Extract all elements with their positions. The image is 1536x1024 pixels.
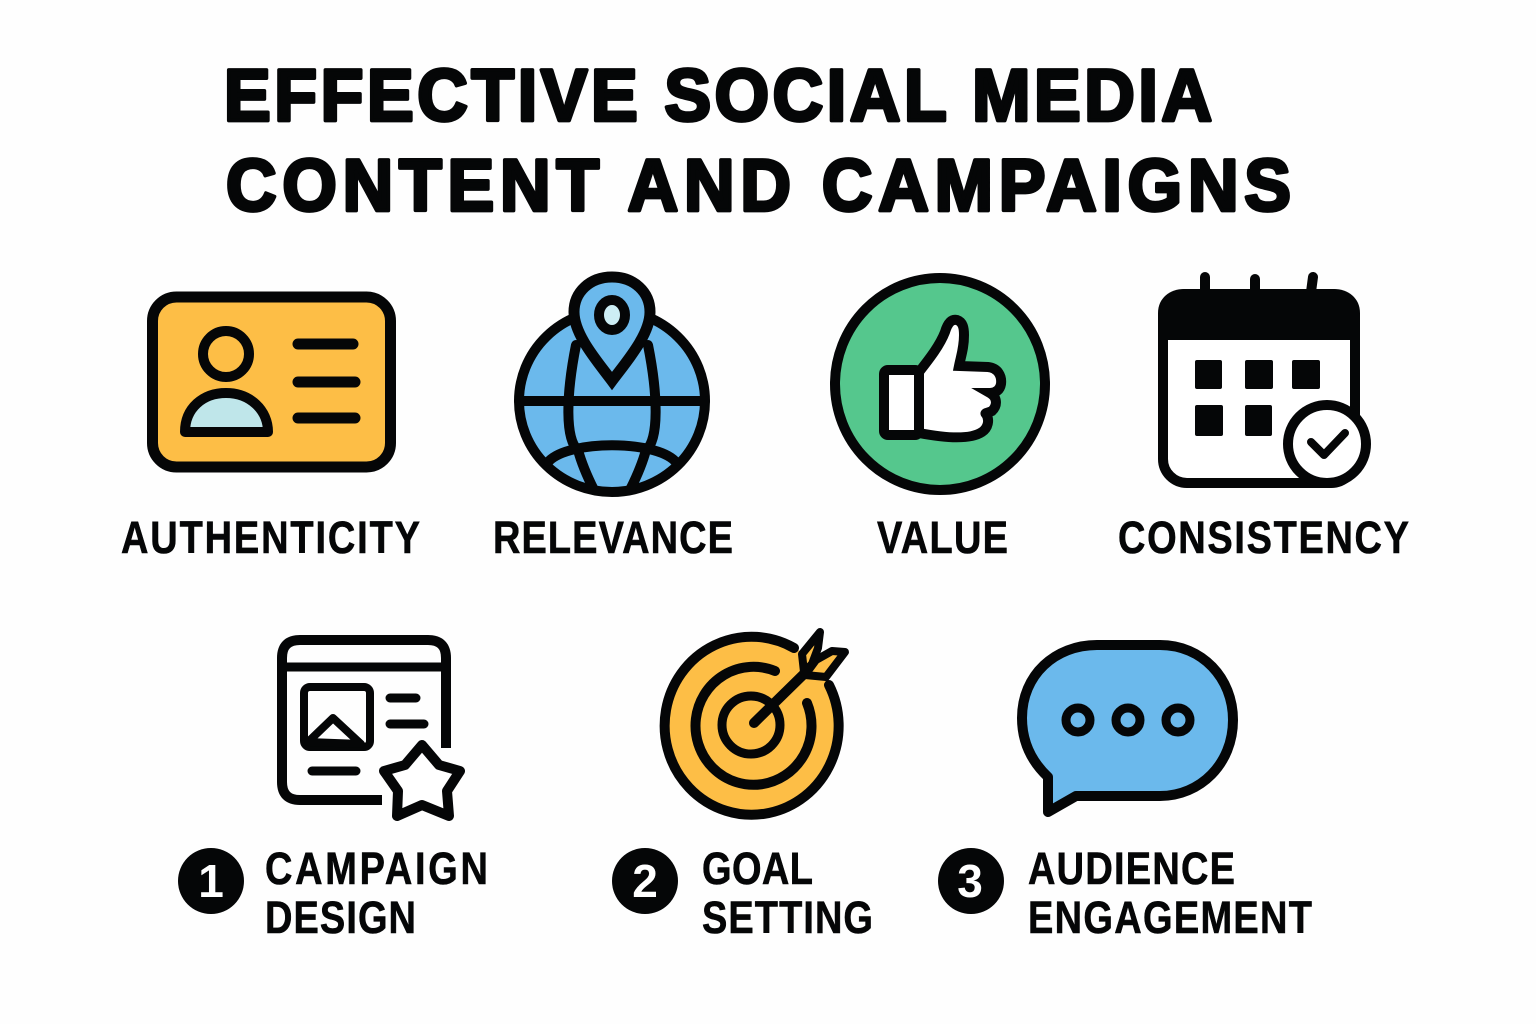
icon: thumbs up xyxy=(835,278,1045,490)
icon: speech bubble xyxy=(1022,645,1233,812)
label: campaign design: CAMPAIGN xyxy=(265,843,488,894)
label: relevance: RELEVANCE xyxy=(493,512,733,563)
calendar day squares xyxy=(1195,360,1320,436)
title: CONTENT AND CAMPAIGNS xyxy=(226,145,1291,227)
panel: audience engagement xyxy=(938,645,1312,943)
number badge 1 xyxy=(178,848,244,914)
icon: web page with star xyxy=(282,640,460,816)
label: authenticity: AUTHENTICITY xyxy=(121,512,420,563)
panel: campaign design xyxy=(178,640,488,943)
icon: ID card xyxy=(152,297,390,467)
title xyxy=(224,55,1291,227)
number badge 3 xyxy=(938,848,1004,914)
number badge 2 xyxy=(612,848,678,914)
label: campaign design: DESIGN xyxy=(265,892,416,943)
number badge 3: 3 xyxy=(957,855,983,907)
icon: calendar with check xyxy=(1158,277,1366,483)
label: audience engagement: AUDIENCE xyxy=(1028,843,1235,894)
label: goal setting: GOAL xyxy=(702,843,813,894)
label: goal setting xyxy=(702,843,873,943)
panel: authenticity xyxy=(121,297,420,563)
label: value: VALUE xyxy=(877,512,1008,563)
number badge 1: 1 xyxy=(198,855,224,907)
panel: goal setting xyxy=(612,632,873,943)
label: audience engagement xyxy=(1028,843,1312,943)
panel: relevance xyxy=(493,277,733,563)
panel: consistency xyxy=(1118,277,1409,563)
label: audience engagement: ENGAGEMENT xyxy=(1028,892,1312,943)
panel: value xyxy=(835,278,1045,563)
icon: target with arrow xyxy=(663,632,845,816)
label: consistency: CONSISTENCY xyxy=(1118,512,1409,563)
label: campaign design xyxy=(265,843,488,943)
title: EFFECTIVE SOCIAL MEDIA xyxy=(224,55,1212,137)
label: goal setting: SETTING xyxy=(702,892,873,943)
number badge 2: 2 xyxy=(632,855,658,907)
icon: globe with location pin xyxy=(519,277,705,492)
